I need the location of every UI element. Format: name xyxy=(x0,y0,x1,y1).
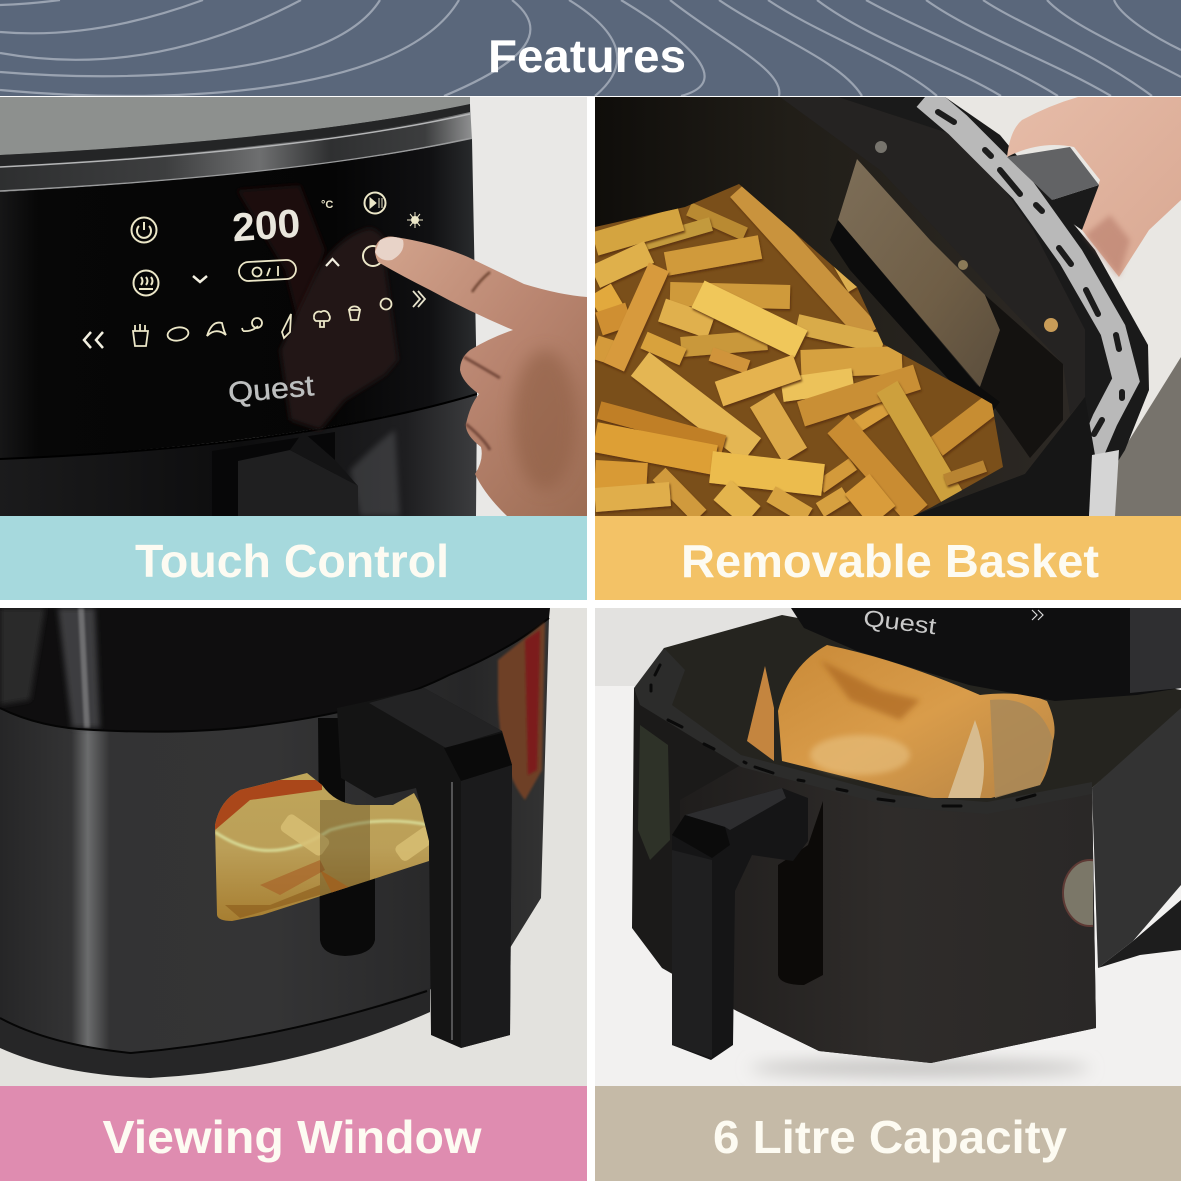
logo: Quest: Quest xyxy=(227,370,315,410)
photo: drawer with viewing window xyxy=(0,608,587,1086)
viewing window xyxy=(838,159,1000,387)
photo: open basket with roast chicken xyxy=(595,605,1181,1086)
lid xyxy=(0,97,470,155)
panel: touch control xyxy=(0,97,587,600)
photo: basket of fries xyxy=(595,97,1181,516)
handle xyxy=(337,688,512,1048)
body xyxy=(0,139,477,459)
basket front panel xyxy=(680,765,1096,1063)
basket interior xyxy=(595,97,1085,516)
label bar: 6 Litre Capacity: 6 Litre Capacity xyxy=(713,1111,1067,1163)
panel: 6 litre capacity xyxy=(595,605,1181,1181)
panel: viewing window xyxy=(0,608,587,1181)
fries xyxy=(595,184,1015,516)
button under finger xyxy=(363,246,383,266)
label bar: Removable Basket xyxy=(595,516,1181,600)
hand holding handle xyxy=(1007,97,1181,277)
icon: time temperature button xyxy=(239,259,296,281)
basket interior xyxy=(636,615,1181,808)
icon: double chevron right xyxy=(413,291,425,307)
handle slot xyxy=(778,801,823,985)
handle slot xyxy=(318,718,375,956)
basket left reflection xyxy=(638,725,670,860)
screws xyxy=(875,141,1058,332)
handle xyxy=(250,432,335,460)
reflection of hand xyxy=(280,228,398,430)
reflections on drawer xyxy=(350,430,400,516)
lower drawer xyxy=(0,394,477,516)
icon: preheat xyxy=(134,270,158,296)
label bar: Touch Control xyxy=(0,516,587,600)
icon: double chevron left xyxy=(84,332,103,348)
display: 200: 200 xyxy=(231,202,302,250)
heading: Features: Features xyxy=(488,30,686,82)
hand pressing button xyxy=(375,237,587,516)
upper body xyxy=(0,608,550,732)
viewing window xyxy=(215,773,437,923)
lid button icon xyxy=(1032,610,1043,620)
basket front lip xyxy=(913,397,1095,516)
rim xyxy=(0,104,472,192)
basket silhouette xyxy=(632,688,1096,1063)
rear base xyxy=(1098,900,1181,968)
logo: Quest: Quest xyxy=(862,605,938,639)
lower body xyxy=(0,618,549,1053)
icon: power xyxy=(132,218,156,242)
right side of basket xyxy=(1092,705,1181,968)
handle xyxy=(672,788,808,1060)
fingerprint reflection xyxy=(1063,860,1117,926)
icon: light xyxy=(407,212,423,228)
chicken xyxy=(747,645,1055,798)
side reflection xyxy=(498,622,545,800)
basket vented rim xyxy=(925,97,1126,455)
label bar: 6 Litre Capacity xyxy=(595,1086,1181,1181)
floor shadow xyxy=(750,1060,1090,1076)
label bar: Touch Control: Touch Control xyxy=(135,535,449,587)
basket rim vents xyxy=(634,648,1092,814)
unit: celsius: °C xyxy=(321,199,333,211)
food icons xyxy=(133,298,392,346)
base xyxy=(0,988,430,1078)
icon: down chevron xyxy=(193,276,207,282)
panel: removable basket xyxy=(595,97,1181,600)
icon: play pause xyxy=(364,192,386,214)
reflection of arm xyxy=(240,186,324,314)
label bar: Viewing Window xyxy=(0,1086,587,1181)
header banner xyxy=(0,0,1181,96)
silver lower corner xyxy=(1089,450,1119,516)
lid with logo xyxy=(791,608,1181,701)
label bar: Removable Basket: Removable Basket xyxy=(681,535,1099,587)
label bar: Viewing Window: Viewing Window xyxy=(102,1111,482,1163)
icon: up chevron xyxy=(326,259,339,266)
photo: control panel of air fryer xyxy=(0,97,587,516)
basket outer shell xyxy=(838,97,1149,516)
